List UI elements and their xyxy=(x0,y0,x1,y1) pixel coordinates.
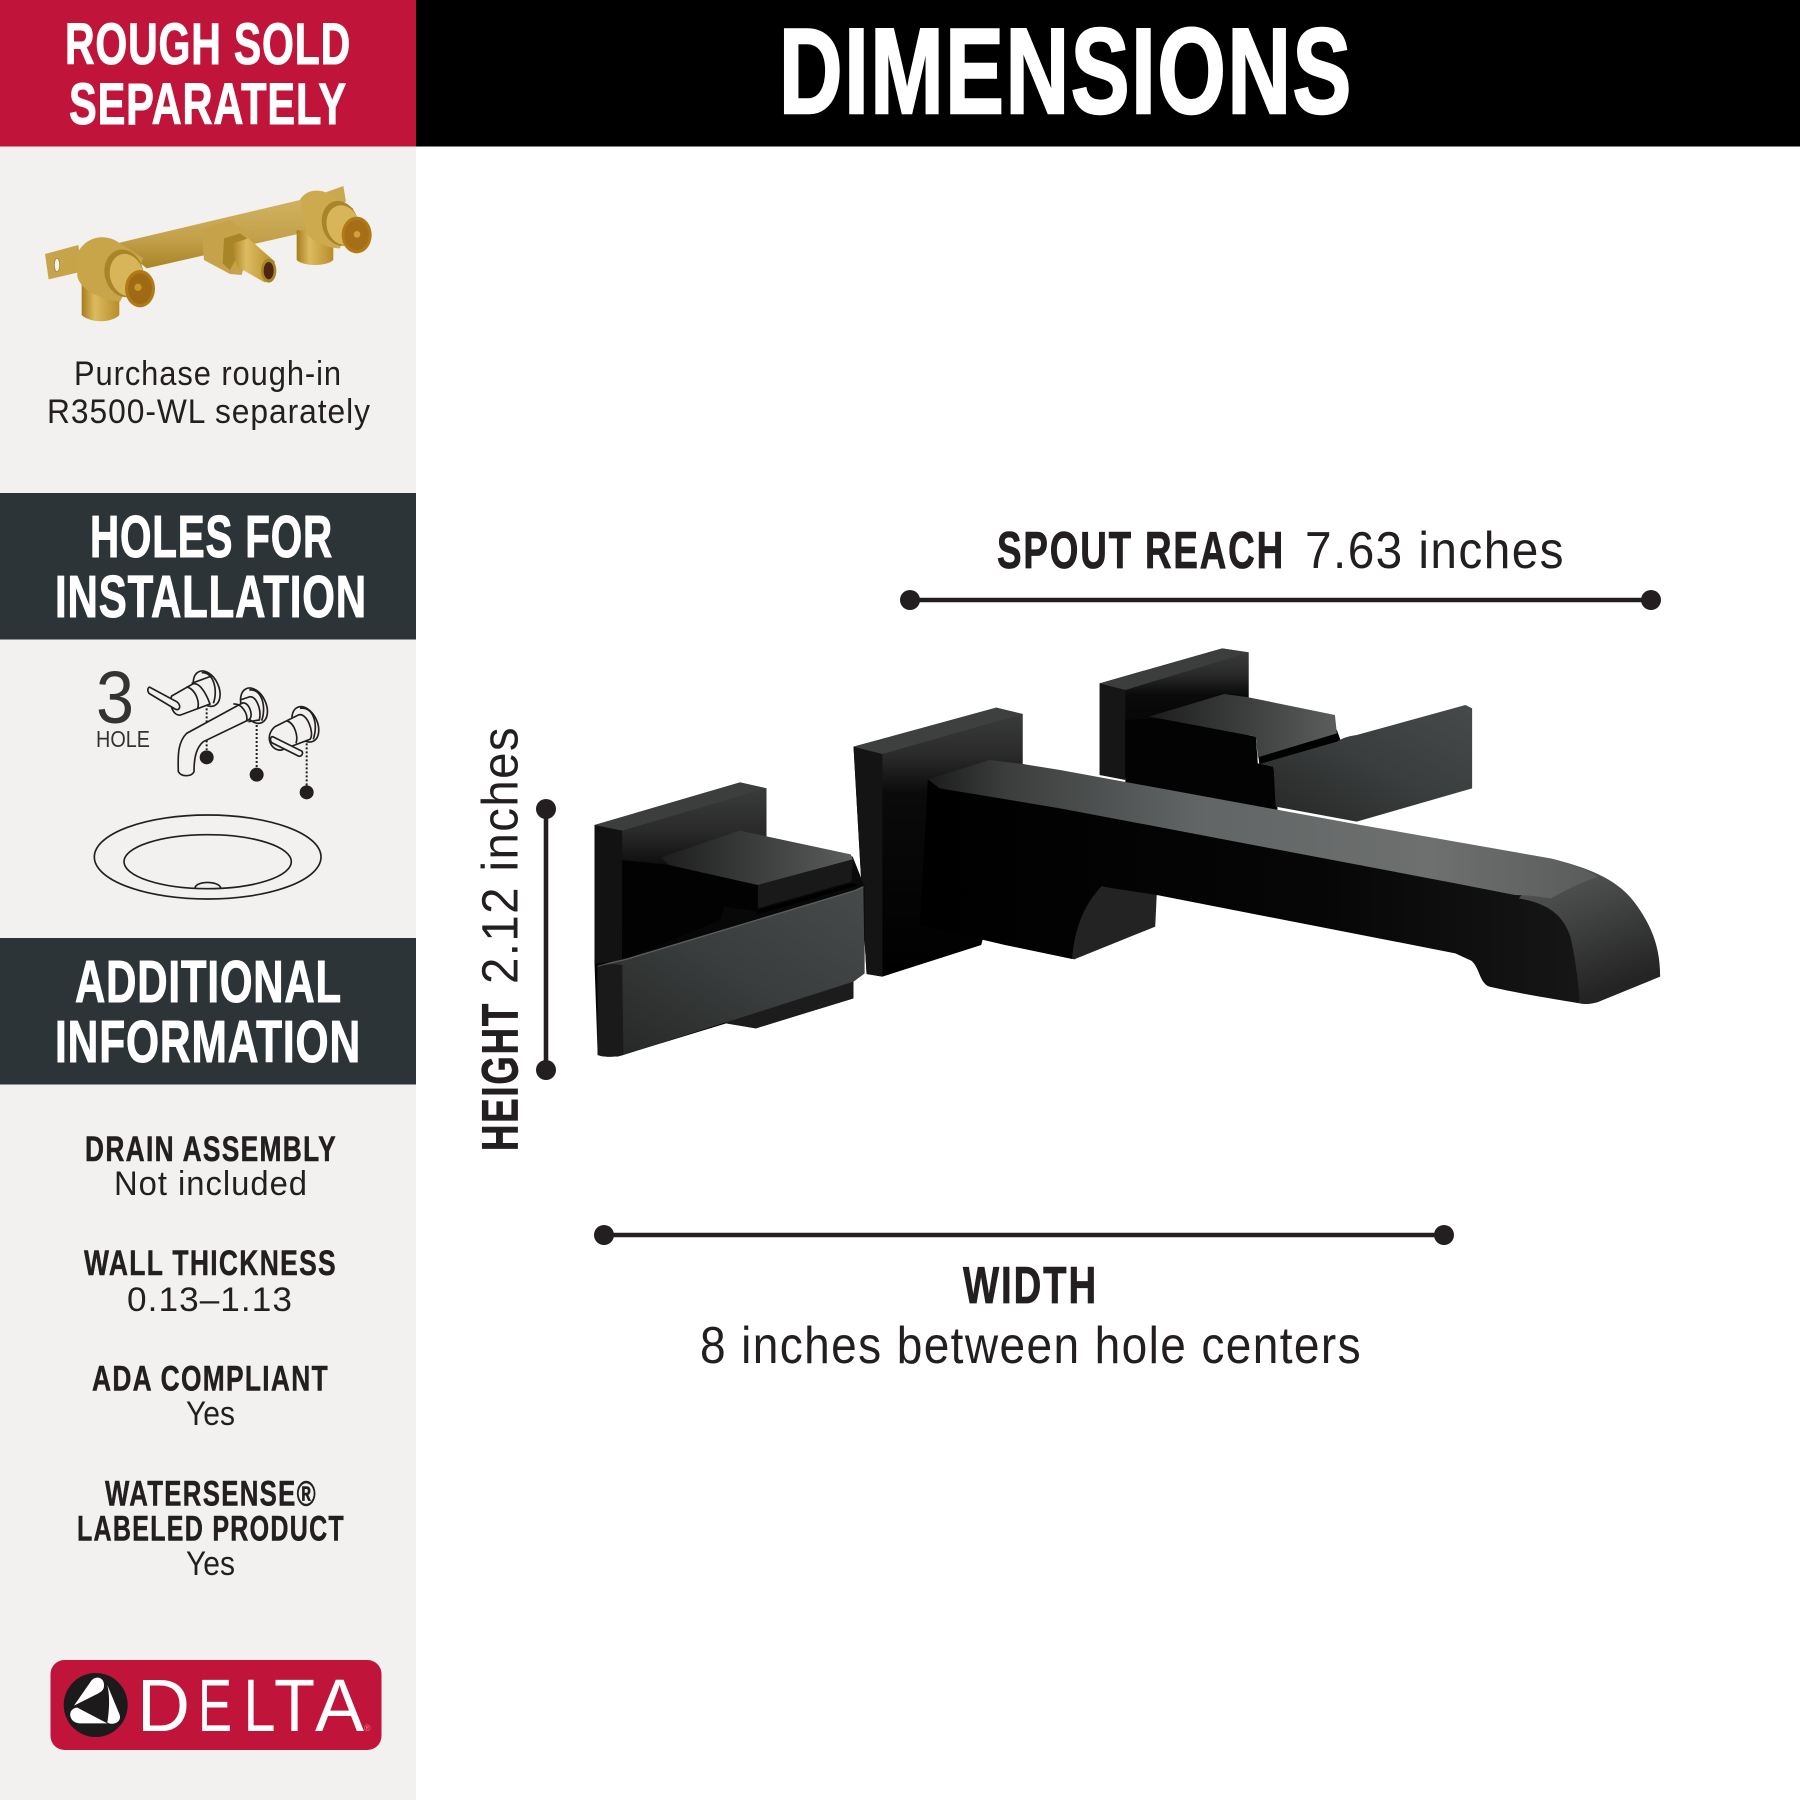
icon: three hole faucet diagram: HOLE xyxy=(96,726,150,752)
logo: delta: E xyxy=(198,1664,232,1747)
dimension: height: HEIGHT xyxy=(472,1002,528,1151)
dimension: width: WIDTH xyxy=(963,1257,1098,1315)
text: ada compliant: ADA COMPLIANT xyxy=(92,1360,329,1398)
logo: delta: D xyxy=(137,1664,190,1747)
banner: rough sold separately: ROUGH SOLD xyxy=(65,12,351,77)
text: drain assembly: DRAIN ASSEMBLY xyxy=(85,1130,337,1169)
text: drain assembly xyxy=(85,1130,337,1203)
banner: rough sold separately xyxy=(0,0,416,146)
text: drain assembly: Not included xyxy=(114,1165,308,1203)
icon: brass rough-in valve xyxy=(45,186,372,321)
logo: delta: T xyxy=(274,1664,315,1747)
icon: three hole faucet diagram: 3 xyxy=(96,656,134,739)
heading: additional information: ADDITIONAL xyxy=(75,949,342,1015)
logo: delta: ® xyxy=(364,1723,371,1733)
heading: holes for installation xyxy=(0,493,416,640)
text: watersense labeled product xyxy=(77,1474,345,1583)
heading: additional information xyxy=(0,938,416,1084)
heading: holes for installation: INSTALLATION xyxy=(55,564,367,630)
heading: additional information: INFORMATION xyxy=(55,1009,361,1075)
dimension: spout reach xyxy=(900,522,1661,610)
text: purchase rough-in: Purchase rough-in xyxy=(74,355,342,393)
text: watersense labeled product: WATERSENSE® xyxy=(105,1474,317,1514)
text: purchase rough-in: R3500-WL separately xyxy=(47,393,371,431)
text: wall thickness: 0.13–1.13 xyxy=(127,1281,293,1319)
dimension: height: 2.12 inches xyxy=(472,726,528,984)
dimension: spout reach: SPOUT REACH xyxy=(997,522,1285,580)
text: watersense labeled product: Yes xyxy=(186,1545,235,1583)
text: watersense labeled product: LABELED PRODUCT xyxy=(77,1510,345,1548)
text: ada compliant xyxy=(92,1360,329,1433)
dimension: height xyxy=(472,726,556,1151)
banner: rough sold separately: SEPARATELY xyxy=(69,72,347,137)
front left handle xyxy=(595,782,865,1057)
logo: delta: L xyxy=(244,1664,276,1747)
text: ada compliant: Yes xyxy=(186,1395,235,1433)
text: wall thickness: WALL THICKNESS xyxy=(84,1244,337,1283)
dimension: width xyxy=(594,1225,1454,1375)
logo: delta xyxy=(50,1660,382,1750)
spout xyxy=(920,760,1660,1004)
heading: holes for installation: HOLES FOR xyxy=(90,504,333,570)
faucet photo xyxy=(595,648,1660,1057)
back right handle xyxy=(1100,648,1472,822)
text: wall thickness xyxy=(84,1244,337,1319)
sidebar panel background xyxy=(0,146,416,1800)
dimension: spout reach: 7.63 inches xyxy=(1305,522,1565,580)
logo: delta: A xyxy=(315,1664,365,1747)
dimension: width: 8 inches between hole centers xyxy=(700,1317,1362,1375)
title: dimensions: DIMENSIONS xyxy=(779,3,1353,139)
centre spout plate xyxy=(854,708,1023,977)
title: dimensions xyxy=(416,0,1800,146)
icon: three hole faucet diagram xyxy=(94,656,324,899)
text: purchase rough-in xyxy=(47,355,371,431)
